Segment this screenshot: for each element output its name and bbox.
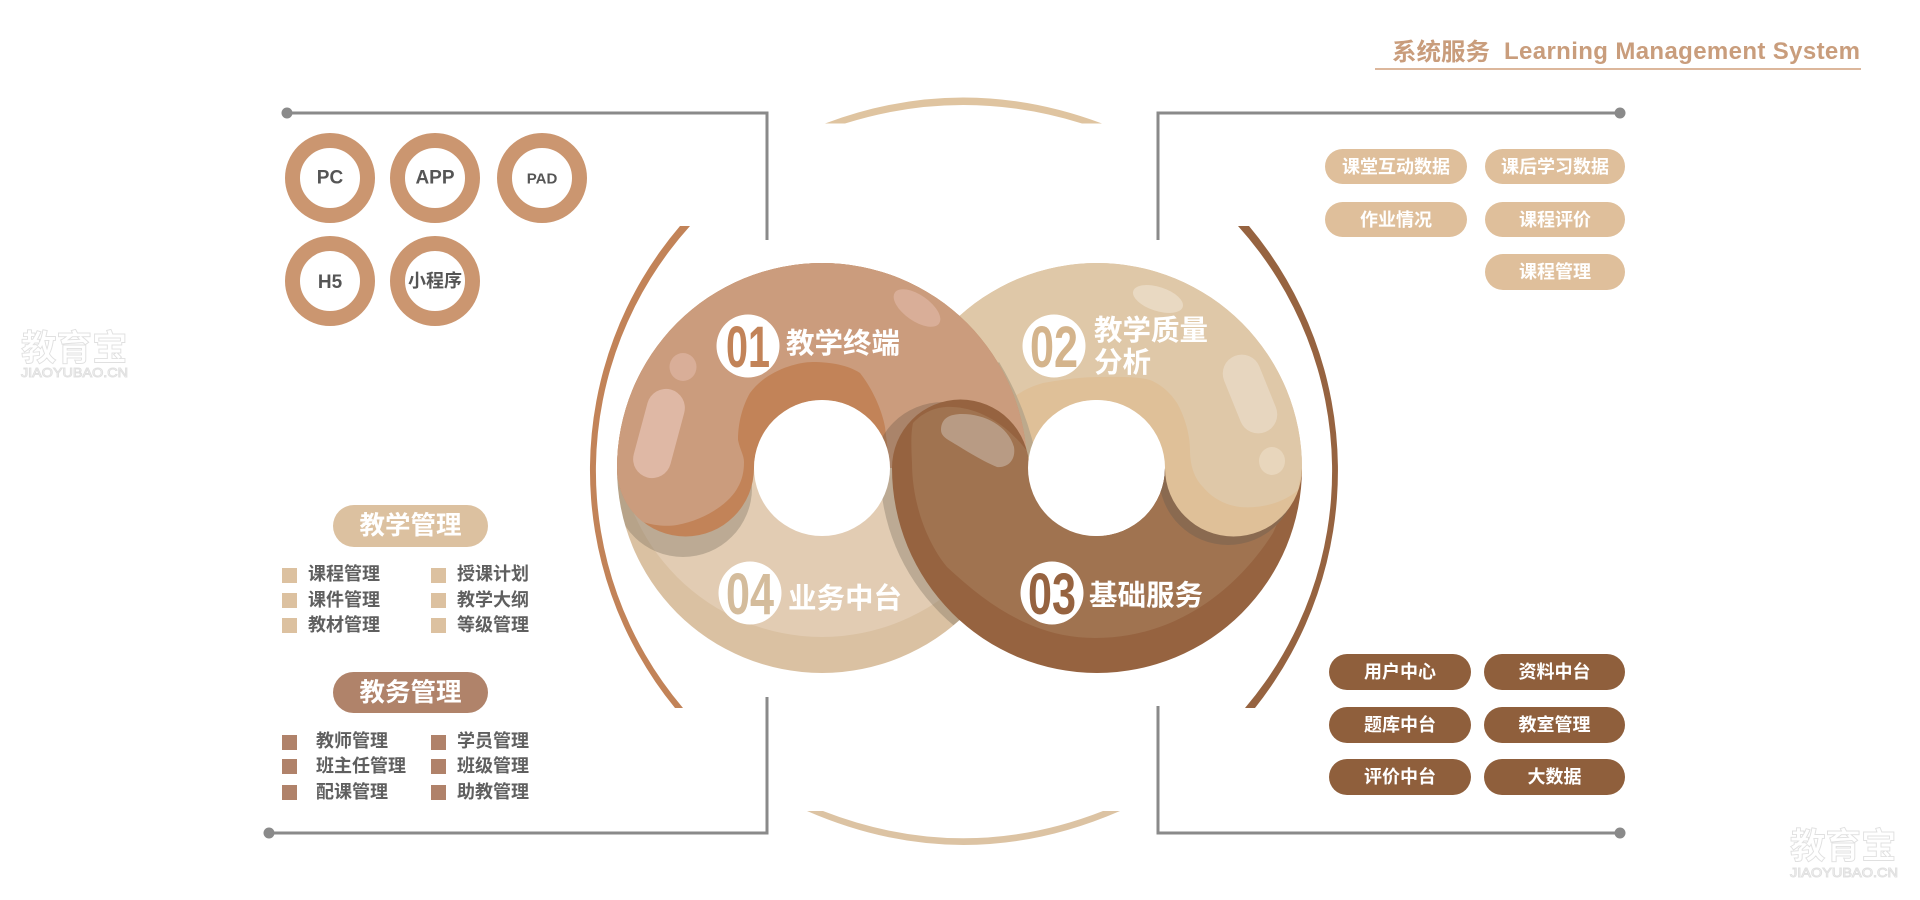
panel: foundation service pills: 用户中心 <box>1364 661 1436 682</box>
bracket: top right <box>1158 108 1626 240</box>
label 03: 基础服务 <box>1089 580 1203 612</box>
list left column: 教师管理 <box>316 730 388 751</box>
heading pill <box>333 672 488 713</box>
hole: left <box>754 400 890 536</box>
arc: bottom <box>807 811 1120 845</box>
list left column <box>282 730 406 802</box>
watermark: right: 教育宝 <box>1790 826 1897 866</box>
label 02: 教学质量 <box>1094 315 1208 347</box>
ring: mini program: 小程序 <box>408 270 462 291</box>
label 04 <box>718 562 902 627</box>
infinity diagram <box>614 227 1302 673</box>
segment 01 <box>617 263 1027 542</box>
list left column: 教材管理 <box>308 614 380 635</box>
hole: right <box>1028 400 1164 536</box>
bracket: bottom left <box>264 697 767 838</box>
label 04: 业务中台 <box>788 582 902 615</box>
list right column: 等级管理 <box>457 614 529 635</box>
list right column: 教学大纲 <box>457 589 529 610</box>
panel: foundation service pills: 题库中台 <box>1364 714 1436 735</box>
panel: teaching quality pills: 课堂互动数据 <box>1342 157 1450 177</box>
list right column: 学员管理 <box>457 730 529 751</box>
list right column <box>431 564 529 635</box>
label 01: 01 <box>726 315 770 380</box>
arc: top <box>825 98 1102 124</box>
panel: teaching quality pills: 课后学习数据 <box>1501 156 1609 177</box>
label 02 <box>1022 314 1208 380</box>
ring: APP <box>398 140 472 216</box>
ring: PC <box>292 140 368 216</box>
watermark: left: 教育宝 <box>21 328 128 368</box>
panel: teaching quality pills <box>1325 149 1625 290</box>
label 03 <box>1020 562 1203 627</box>
label 01: 教学终端 <box>786 328 900 360</box>
segment 03 <box>892 400 1302 673</box>
list left column: 配课管理 <box>316 781 388 802</box>
list left column: 课程管理 <box>308 563 380 584</box>
list right column: 助教管理 <box>457 781 529 802</box>
panel: foundation service pills <box>1329 654 1625 795</box>
panel: foundation service pills: 资料中台 <box>1518 661 1590 682</box>
list left column: 课件管理 <box>308 589 380 610</box>
heading pill: 教学管理 <box>359 512 462 540</box>
ring: PC: PC <box>317 168 343 188</box>
list left column: 班主任管理 <box>316 755 406 776</box>
label 04: 04 <box>726 562 774 627</box>
panel: teaching quality pills: 作业情况 <box>1360 210 1432 230</box>
ring: H5: H5 <box>318 272 343 293</box>
ring: PAD <box>504 140 580 216</box>
label 02: 分析 <box>1094 347 1151 379</box>
arc: right <box>1238 226 1338 708</box>
ring: H5 <box>292 244 368 318</box>
bracket: bottom right <box>1158 706 1626 838</box>
title: 系统服务 <box>1392 39 1490 66</box>
label 01 <box>716 314 900 380</box>
heading pill: 教务管理 <box>359 679 462 707</box>
panel: foundation service pills: 评价中台 <box>1364 766 1436 787</box>
watermark: left: JIAOYUBAO.CN <box>21 366 128 380</box>
list right column: 班级管理 <box>457 755 529 776</box>
arc: left <box>590 226 690 708</box>
list right column: 授课计划 <box>457 564 529 584</box>
panel: platform rings <box>292 140 580 318</box>
panel: foundation service pills: 教室管理 <box>1518 714 1590 735</box>
heading pill <box>333 505 488 547</box>
panel: teaching quality pills: 课程管理 <box>1519 261 1591 282</box>
list right column <box>431 730 529 802</box>
title <box>1375 38 1861 70</box>
panel: teaching management <box>282 505 529 635</box>
watermark: right: JIAOYUBAO.CN <box>1790 866 1898 880</box>
ring: PAD: PAD <box>527 170 557 188</box>
panel: teaching quality pills: 课程评价 <box>1519 210 1591 230</box>
segment 02 base <box>892 263 1302 536</box>
segment 04 <box>617 263 960 673</box>
ring: mini program <box>398 244 472 318</box>
ring: APP: APP <box>415 168 455 188</box>
label 02: 02 <box>1030 315 1078 380</box>
panel: foundation service pills: 大数据 <box>1528 767 1582 787</box>
title: Learning Management System <box>1504 38 1860 65</box>
list left column <box>282 563 380 635</box>
bracket: top left <box>282 108 767 240</box>
segment 02 cap <box>1165 468 1302 536</box>
label 03: 03 <box>1028 562 1076 627</box>
panel: academic affairs <box>282 672 529 802</box>
